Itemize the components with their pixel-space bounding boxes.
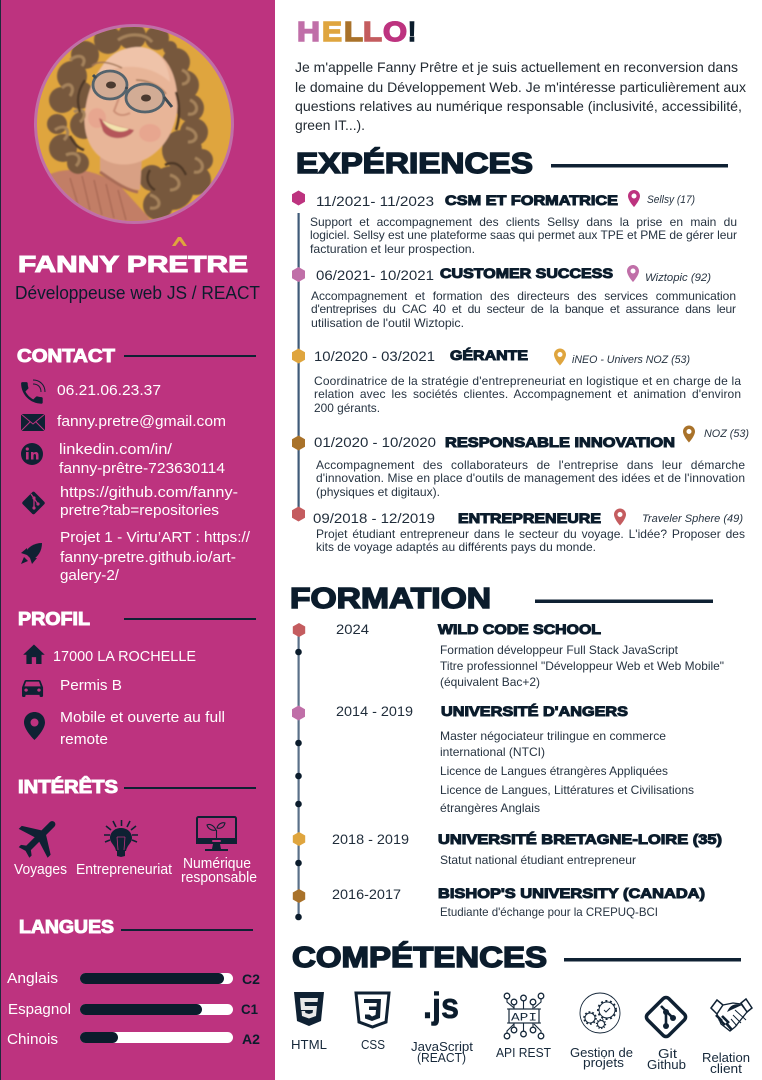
formation: université d'angers: international (NTCI) [440, 745, 545, 759]
label: numérique responsable: Numérique [183, 855, 251, 872]
experience: gérante: Coordinatrice de la stratégie d'entrepreneuriat en logistique et en charge de la [314, 374, 741, 388]
skill: gestion de projets: Gestion de [570, 1045, 633, 1060]
skill: javascript: JavaScript [411, 1039, 473, 1054]
contact: project [60, 529, 251, 584]
formation: wild code school: (équivalent Bac+2) [440, 675, 540, 689]
bar: chinois [7, 1031, 260, 1048]
formation: université d'angers: étrangères Anglais [440, 801, 540, 815]
panel: sidebar [0, 0, 275, 1080]
contact: phone number: 06.21.06.23.37 [57, 382, 161, 399]
experience: CSM et formatrice: CSM ET FORMATRICE [445, 192, 618, 208]
skill: css [356, 993, 389, 1052]
contact: github: https://github.com/fanny- [60, 484, 238, 501]
formation: wild code school: Formation développeur Full Stack JavaScript [440, 643, 679, 657]
experience: CSM et formatrice [292, 190, 737, 256]
section: langues [7, 917, 260, 1048]
bar: espagnol [8, 1001, 258, 1018]
contact: email: fanny.pretre@gmail.com [57, 413, 226, 430]
experience: gérante: relation avec les sociétés clientes. Accompagnement et animation d'environ [314, 387, 741, 401]
skill: api rest: API REST [496, 1045, 551, 1060]
skill: javascript: (REACT) [417, 1050, 466, 1065]
heading: compétences: COMPÉTENCES [292, 940, 547, 974]
heading: hello: L [363, 16, 382, 47]
skill: javascript [411, 985, 473, 1065]
timeline: experience axis [298, 213, 300, 518]
formation: université bretagne-loire [293, 831, 722, 867]
mobility: remote [60, 731, 108, 748]
skill: git github: Git [658, 1046, 677, 1061]
skill: relation client: Relation [702, 1050, 750, 1065]
formation: université bretagne-loire: 2018 - 2019 [332, 831, 409, 847]
heading: hello: O [383, 16, 407, 47]
section: intérêts [10, 776, 257, 886]
formation: université d'angers: 2014 - 2019 [336, 703, 413, 719]
label: numérique responsable [181, 855, 257, 886]
experience: gérante: GÉRANTE [450, 347, 528, 363]
experience: customer success [292, 265, 736, 330]
section: compétences [291, 940, 752, 1076]
formation: wild code school: 2024 [336, 621, 369, 637]
formation: bishop's university: Etudiante d'échange pour la CREPUQ-BCI [440, 905, 658, 919]
skill: html [291, 992, 327, 1052]
contact: linkedin: fanny-prêtre-723630114 [59, 460, 225, 477]
contact: github: pretre?tab=repositories [60, 502, 219, 519]
experience: customer success: CUSTOMER SUCCESS [440, 265, 613, 281]
icon: envelope [21, 414, 45, 431]
formation: université bretagne-loire: Statut national étudiant entrepreneur [440, 853, 636, 867]
experience: CSM et formatrice: facturation et leur prospection. [310, 242, 475, 256]
label: entrepreneuriat: Entrepreneuriat [76, 861, 173, 878]
heading: formation [290, 583, 713, 615]
bar: chinois: A2 [242, 1031, 260, 1047]
skill: javascript: .js [423, 985, 459, 1026]
mobility: Mobile et ouverte au full [60, 709, 225, 726]
contact: linkedin: linkedin.com/in/ [59, 441, 173, 458]
experience: CSM et formatrice: Sellsy (17) [647, 194, 695, 206]
experience: gérante [292, 347, 741, 415]
experience: responsable innovation [292, 426, 749, 499]
skill: api rest: API [511, 1012, 537, 1024]
formation: université d'angers [292, 703, 694, 815]
icon: rocket [21, 543, 42, 564]
icon: home [23, 644, 45, 664]
skill: html: HTML [291, 1037, 327, 1052]
experience: responsable innovation: Accompagnement des collaborateurs de l'entreprise dans leur démarche [316, 458, 745, 472]
formation: bishop's university [293, 885, 705, 919]
skill: gestion de projets [570, 993, 633, 1070]
text block: introduction: green IT...). [295, 117, 365, 133]
experience: entrepreneure: 09/2018 - 12/2019 [313, 510, 435, 526]
skill: relation client: client [710, 1061, 742, 1076]
experience: entrepreneure: Projet étudiant entrepreneur dans le secteur du voyage. L'idée? Proposer des [316, 527, 745, 541]
heading: hello: E [322, 16, 342, 47]
icon: linkedin [21, 443, 43, 465]
text block: introduction: le domaine du Développement Web. Je m'intéresse particulièrement aux [295, 79, 746, 95]
job title: Développeuse web JS / REACT [15, 283, 260, 303]
name: FANNY PRETRE [18, 251, 248, 277]
location: 17000 LA ROCHELLE [53, 648, 196, 665]
heading: contact: CONTACT [17, 346, 115, 366]
experience: entrepreneure: kits de voyage adaptés au différents pays du monde. [316, 540, 596, 554]
experience: responsable innovation: RESPONSABLE INNOVATION [445, 434, 675, 450]
text block: introduction [295, 59, 746, 133]
experience: customer success: 06/2021- 10/2021 [316, 267, 434, 283]
formation: wild code school [293, 621, 724, 689]
formation: bishop's university: BISHOP'S UNIVERSITY (CANADA) [438, 885, 705, 901]
photo: portrait [34, 22, 234, 230]
bar: espagnol: C1 [241, 1001, 258, 1017]
experience: customer success: Wiztopic (92) [645, 272, 711, 284]
icon: monitor with plant [196, 817, 237, 851]
section: formation [290, 583, 724, 920]
experience: customer success: Accompagnement et formation des directeurs des services communication [311, 289, 736, 303]
name [18, 237, 248, 277]
skill: git github [645, 996, 687, 1072]
experience: responsable innovation: (physiques et digitaux). [316, 485, 440, 499]
section: contact [17, 346, 256, 584]
heading: expériences [296, 146, 728, 180]
text block: introduction: questions relatives au numérique responsable (inclusivité, accessibilité, [295, 98, 742, 114]
experience: responsable innovation: d'innovation. Mise en place d'outils de management des idées et de l'innovation [316, 471, 745, 485]
heading: intérêts: INTÉRÊTS [18, 776, 118, 797]
icon: car [22, 680, 43, 697]
experience: responsable innovation: NOZ (53) [704, 428, 749, 440]
experience: gérante: iNEO - Univers NOZ (53) [572, 354, 690, 366]
icon: light bulb [104, 820, 138, 857]
heading: hello: H [297, 16, 320, 47]
formation: université d'angers: Licence de Langues, Littératures et Civilisations [440, 783, 694, 797]
bar: anglais: Anglais [7, 970, 58, 987]
contact: project: galery-2/ [60, 567, 120, 584]
contact: linkedin [59, 441, 225, 477]
experience: entrepreneure [292, 506, 745, 554]
contact: github [60, 484, 238, 519]
icon: location pin [24, 712, 45, 740]
formation: université d'angers: Licence de Langues étrangères Appliquées [440, 764, 668, 778]
timeline: formation axis [295, 630, 302, 920]
label: numérique responsable: responsable [181, 869, 257, 886]
experience: CSM et formatrice: Support et accompagnement des clients Sellsy dans la prise en main du [310, 215, 737, 229]
icon: git [21, 491, 46, 515]
heading: langues: LANGUES [19, 917, 114, 937]
section: expériences [292, 146, 749, 554]
icon: plane [10, 808, 69, 867]
skill: api rest [496, 993, 551, 1060]
heading: hello: ! [408, 16, 416, 47]
experience: customer success: d'entreprises du CAC 40 et du secteur de la banque et assurance dans leur [311, 302, 736, 316]
experience: customer success: utilisation de l'outil Wiztopic. [311, 316, 464, 330]
bar: anglais [7, 970, 260, 987]
formation: wild code school: Titre professionnel "Développeur Web et Web Mobile" [440, 659, 724, 673]
formation: wild code school: WILD CODE SCHOOL [438, 621, 601, 637]
heading: formation: FORMATION [290, 583, 491, 615]
text block: introduction: Je m'appelle Fanny Prêtre et je suis actuellement en reconversion dans [295, 59, 738, 75]
label: voyages: Voyages [14, 861, 67, 878]
skill: relation client [702, 999, 752, 1076]
experience: entrepreneure: ENTREPRENEURE [458, 510, 601, 526]
icon: phone [21, 380, 45, 404]
experience: gérante: 10/2020 - 03/2021 [314, 348, 435, 364]
skill: css: CSS [361, 1037, 385, 1052]
formation: université d'angers: Master négociateur trilingue en commerce [440, 729, 666, 743]
experience: CSM et formatrice: logiciel. Sellsy est une plateforme saas qui permet aux TPE et PME de gérer leur [310, 228, 737, 242]
heading: profil: PROFIL [18, 609, 90, 629]
experience: responsable innovation: 01/2020 - 10/2020 [314, 434, 436, 450]
heading: hello: L [344, 16, 363, 47]
formation: université d'angers: UNIVERSITÉ D'ANGERS [441, 703, 628, 719]
section: profil [18, 609, 256, 748]
formation: bishop's university: 2016-2017 [332, 886, 401, 902]
contact: project: fanny-pretre.github.io/art- [60, 549, 236, 566]
heading: compétences [292, 940, 741, 974]
skill: git github: Github [647, 1057, 686, 1072]
experience: CSM et formatrice: 11/2021- 11/2023 [316, 193, 434, 209]
contact: project: Projet 1 - Virtu’ART : https:// [60, 529, 251, 546]
mobility [60, 709, 225, 748]
driving licence: Permis B [60, 677, 122, 694]
experience: entrepreneure: Traveler Sphere (49) [642, 513, 743, 525]
bar: anglais: C2 [242, 971, 260, 987]
bar: chinois: Chinois [7, 1031, 58, 1048]
formation: université bretagne-loire: UNIVERSITÉ BRETAGNE-LOIRE (35) [438, 831, 722, 847]
bar: espagnol: Espagnol [8, 1001, 71, 1018]
experience: gérante: 200 gérants. [314, 401, 380, 415]
heading: expériences: EXPÉRIENCES [296, 146, 533, 180]
skill: gestion de projets: projets [583, 1055, 625, 1070]
